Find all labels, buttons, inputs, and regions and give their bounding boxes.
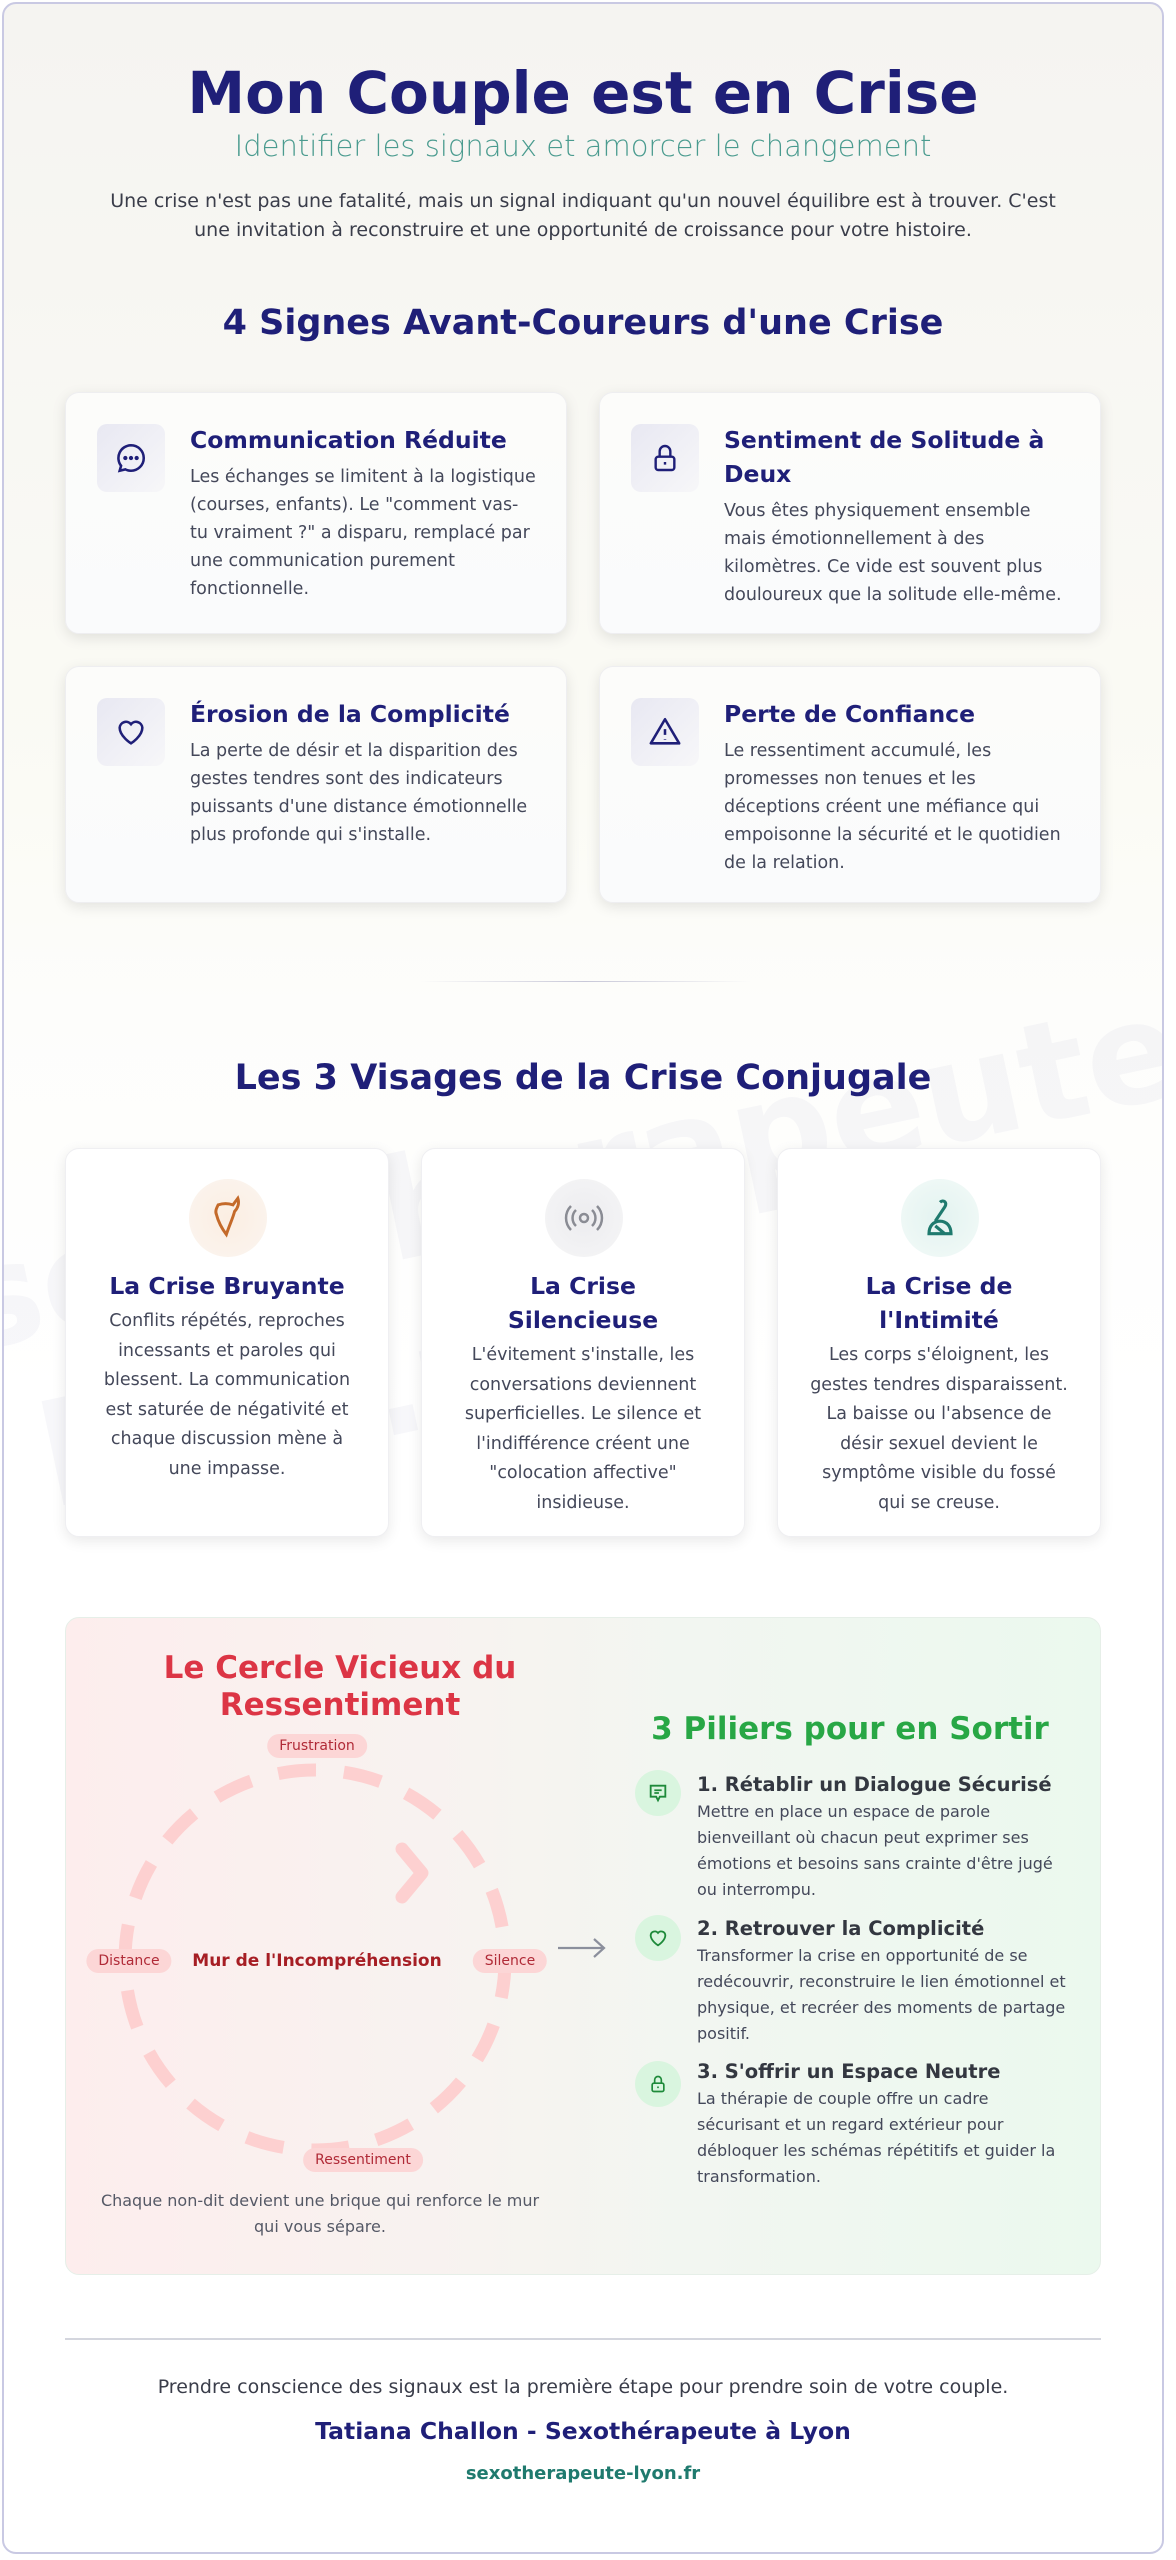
card: bruyante: [65, 1148, 389, 1537]
label: frustration: [267, 1734, 367, 1758]
heading: piliers: 3 Piliers pour en Sortir: [651, 1711, 1049, 1747]
icon: heart: [635, 1915, 681, 1961]
pilier 3: [697, 2060, 1055, 2186]
pilier 3: transformation.: [697, 2167, 821, 2186]
pilier 2: Transformer la crise en opportunité de se: [697, 1946, 1028, 1965]
card: confiance: [599, 666, 1101, 903]
pilier 3: 3. S'offrir un Espace Neutre: [697, 2060, 1000, 2083]
card: solitude: douloureux que la solitude elle-même.: [724, 585, 1062, 605]
card: solitude: kilomètres. Ce vide est souvent plus: [724, 557, 1042, 577]
heading: cercle vicieux: Ressentiment: [220, 1687, 460, 1723]
card: communication: tu vraiment ?" a disparu, remplacé par: [190, 523, 530, 543]
card: bruyante: est saturée de négativité et: [106, 1400, 348, 1420]
intro text: Une crise n'est pas une fatalité, mais un signal indiquant qu'un nouvel équilibre est à trouver. C'est une invitation à reconstruire et une opportunité de croissance pour votre histoire.: [110, 190, 1056, 241]
card: confiance: déceptions créent une méfiance qui: [724, 797, 1039, 817]
card: complicite: puissants d'une distance émotionnelle: [190, 797, 527, 817]
card: communication: Les échanges se limitent à la logistique: [190, 467, 536, 487]
card: bruyante: La Crise Bruyante: [109, 1272, 345, 1300]
card: intimite: La Crise de: [866, 1272, 1012, 1300]
card: intimite: gestes tendres disparaissent.: [810, 1374, 1068, 1394]
heading: 4 signes: 4 Signes Avant-Coureurs d'une Crise: [223, 303, 943, 343]
divider: [420, 981, 750, 982]
card: intimite: Les corps s'éloignent, les: [829, 1345, 1049, 1365]
pilier 2: redécouvrir, reconstruire le lien émotionnel et: [697, 1972, 1066, 1991]
url: sexotherapeute-lyon.fr: [466, 2463, 700, 2484]
icon: chat: [97, 424, 165, 492]
card: solitude: Sentiment de Solitude à: [724, 426, 1044, 454]
pilier 1: Mettre en place un espace de parole: [697, 1802, 990, 1821]
card: bruyante: une impasse.: [169, 1458, 285, 1478]
caption: qui vous sépare.: [254, 2217, 386, 2236]
arrow: [558, 1938, 606, 1958]
card: confiance: Perte de Confiance: [724, 700, 975, 728]
pilier 3: débloquer les schémas répétitifs et guider la: [697, 2141, 1055, 2160]
card: intimite: La baisse ou l'absence de: [827, 1404, 1051, 1424]
card: solitude: mais émotionnellement à des: [724, 529, 984, 549]
label: silence: [473, 1949, 547, 1973]
card: complicite: plus profonde qui s'installe.: [190, 825, 431, 845]
card: solitude: Deux: [724, 460, 791, 488]
pilier 1: 1. Rétablir un Dialogue Sécurisé: [697, 1773, 1052, 1796]
card: silencieuse: L'évitement s'installe, les: [472, 1345, 694, 1365]
footer line: [65, 2338, 1101, 2340]
pilier 1: ou interrompu.: [697, 1880, 816, 1899]
label: distance: [86, 1949, 172, 1973]
pilier 3: sécurisant et un regard extérieur pour: [697, 2115, 1003, 2134]
card: intimite: qui se creuse.: [878, 1492, 1000, 1512]
card: communication: fonctionnelle.: [190, 579, 309, 599]
card: confiance: promesses non tenues et les: [724, 769, 976, 789]
center text: Mur de l'Incompréhension: [192, 1951, 442, 1971]
pilier 1: émotions et besoins sans crainte d'être jugé: [697, 1854, 1053, 1873]
card: silencieuse: [421, 1148, 745, 1537]
caption: [101, 2191, 540, 2236]
label: silence: Silence: [485, 1953, 535, 1969]
panel: cercle & piliers: [65, 1617, 1101, 2275]
card: solitude: Vous êtes physiquement ensemble: [724, 501, 1031, 521]
card: intimite: symptôme visible du fossé: [822, 1463, 1056, 1483]
card: bruyante: chaque discussion mène à: [111, 1429, 343, 1449]
author: Tatiana Challon - Sexothérapeute à Lyon: [315, 2417, 851, 2445]
card: bruyante: incessants et paroles qui: [118, 1340, 336, 1360]
card: bruyante: blessent. La communication: [104, 1370, 350, 1390]
card: confiance: de la relation.: [724, 853, 845, 873]
pilier 2: 2. Retrouver la Complicité: [697, 1917, 984, 1940]
heading: cercle vicieux: Le Cercle Vicieux du: [164, 1650, 516, 1686]
heading: 3 visages: Les 3 Visages de la Crise Conjugale: [235, 1058, 931, 1098]
icon: lock: [631, 424, 699, 492]
card: solitude: [599, 392, 1101, 634]
card: communication: [65, 392, 567, 634]
watermark: lyon.fr: [25, 1274, 566, 1541]
subtitle: Identifier les signaux et amorcer le changement: [235, 129, 931, 163]
card: silencieuse: conversations deviennent: [470, 1374, 696, 1394]
card: silencieuse: La Crise: [530, 1272, 636, 1300]
icon: dialogue: [635, 1770, 681, 1816]
card: confiance: empoisonne la sécurité et le quotidien: [724, 825, 1061, 845]
icon: loud: [189, 1179, 267, 1257]
label: ressentiment: [303, 2148, 423, 2172]
label: distance: Distance: [98, 1953, 160, 1969]
card: silencieuse: "colocation affective": [489, 1463, 677, 1483]
card: silencieuse: superficielles. Le silence et: [465, 1404, 701, 1424]
card: complicite: [65, 666, 567, 903]
card: intimite: [777, 1148, 1101, 1537]
pilier 2: [696, 1917, 1066, 2043]
icon: lock: [635, 2061, 681, 2107]
card: silencieuse: Silencieuse: [508, 1306, 658, 1334]
pilier 2: physique, et recréer des moments de partage: [697, 1998, 1065, 2017]
card: complicite: Érosion de la Complicité: [190, 700, 510, 728]
pilier 1: bienveillant où chacun peut exprimer ses: [697, 1828, 1029, 1847]
card: complicite: gestes tendres sont des indicateurs: [190, 769, 503, 789]
pilier 1: [697, 1773, 1053, 1899]
title: Mon Couple est en Crise: [187, 59, 979, 127]
icon: warning: [631, 698, 699, 766]
pilier 2: positif.: [697, 2024, 750, 2043]
label: frustration: Frustration: [279, 1738, 355, 1754]
card: intimite: désir sexuel devient le: [840, 1434, 1038, 1454]
card: intimite: l'Intimité: [879, 1306, 999, 1334]
footer text: Prendre conscience des signaux est la première étape pour prendre soin de votre couple.: [158, 2376, 1008, 2398]
caption: Chaque non-dit devient une brique qui renforce le mur: [101, 2191, 539, 2210]
icon: signal: [545, 1179, 623, 1257]
label: ressentiment: Ressentiment: [315, 2152, 411, 2168]
card: communication: une communication purement: [190, 551, 455, 571]
card: silencieuse: l'indifférence créent une: [476, 1434, 690, 1454]
icon: intimacy: [901, 1179, 979, 1257]
card: bruyante: Conflits répétés, reproches: [109, 1311, 345, 1331]
watermark: [0, 973, 1176, 1555]
card: silencieuse: insidieuse.: [536, 1492, 630, 1512]
card: confiance: Le ressentiment accumulé, les: [724, 741, 991, 761]
card: complicite: La perte de désir et la disparition des: [190, 741, 518, 761]
diagram: circle: [119, 1764, 511, 2154]
card: communication: Communication Réduite: [190, 426, 507, 454]
card: communication: (courses, enfants). Le "comment vas-: [190, 495, 518, 515]
pilier 3: La thérapie de couple offre un cadre: [697, 2089, 988, 2108]
icon: heart: [97, 698, 165, 766]
heading: cercle vicieux: [164, 1650, 516, 1723]
